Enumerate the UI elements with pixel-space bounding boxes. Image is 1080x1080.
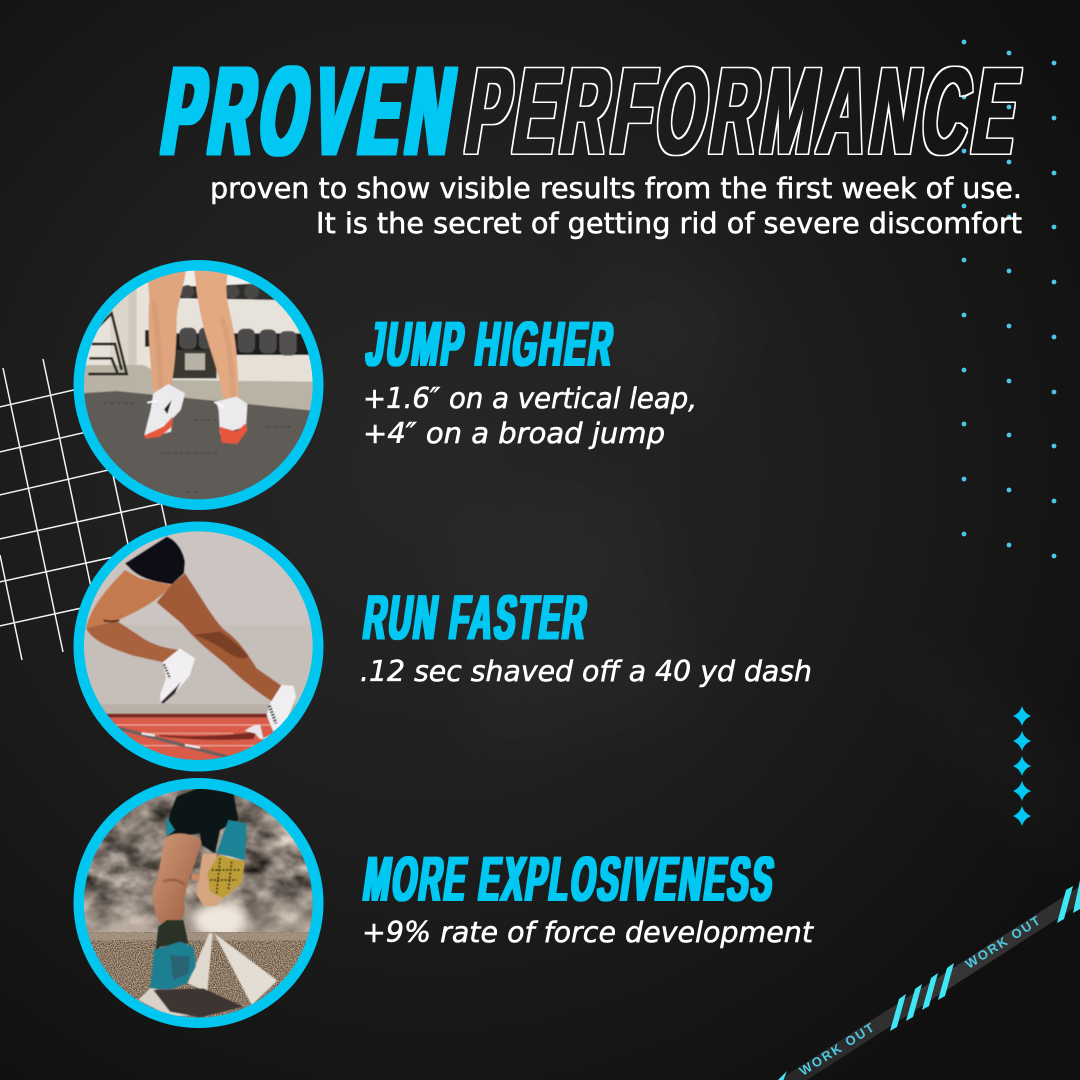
subtitle: It is the secret of getting rid of severe discomfort <box>316 207 1022 240</box>
icon: column of sparkles <box>1013 706 1031 826</box>
photo circle: jump higher <box>74 260 324 510</box>
description: jump higher: +4″ on a broad jump <box>363 417 665 450</box>
subtitle <box>210 172 1022 240</box>
heading: jump higher: JUMP HIGHER <box>362 310 620 379</box>
heading: run faster: RUN FASTER <box>360 583 593 653</box>
feature: jump higher <box>362 310 697 450</box>
title: PROVEN <box>154 41 470 181</box>
ribbon stripes <box>777 877 1080 1080</box>
description: more explosiveness: +9% rate of force development <box>362 916 815 949</box>
decorative dot grid <box>962 40 1056 558</box>
ribbon label: WORK OUT <box>963 912 1044 972</box>
feature: more explosiveness <box>360 845 815 949</box>
subtitle: proven to show visible results from the first week of use. <box>210 172 1022 205</box>
decorative white grid <box>0 359 200 660</box>
description: run faster: .12 sec shaved off a 40 yd dash <box>360 655 812 688</box>
ribbon label: WORK OUT <box>797 1019 878 1079</box>
description: jump higher <box>363 382 697 450</box>
feature: run faster <box>360 583 812 688</box>
workout ribbon <box>777 877 1080 1080</box>
description: jump higher: +1.6″ on a vertical leap, <box>363 382 697 415</box>
photo circle: more explosiveness <box>74 778 324 1028</box>
photo circle: run faster <box>74 522 324 772</box>
